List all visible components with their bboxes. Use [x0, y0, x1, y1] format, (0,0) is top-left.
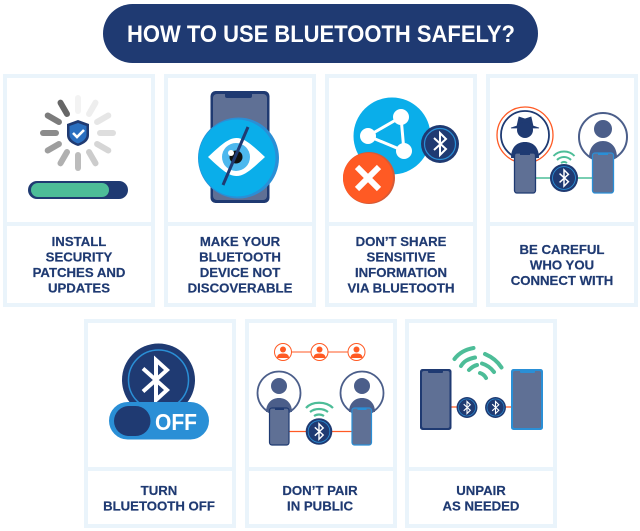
- label: make device not discoverable: MAKE YOUR: [200, 234, 281, 249]
- panel: turn bluetooth off: [84, 319, 236, 528]
- progress bar: [28, 181, 128, 199]
- icon: network of strangers: [274, 344, 365, 360]
- icon: bluetooth badge: [421, 125, 459, 163]
- label: install security patches: PATCHES AND: [33, 265, 125, 280]
- connection lines: [535, 177, 592, 179]
- label: install security patches: UPDATES: [48, 280, 110, 296]
- label: don't pair in public: DON’T PAIR: [282, 483, 358, 498]
- panel: install security patches: [3, 74, 155, 307]
- title banner: HOW TO USE BLUETOOTH SAFELY?: [127, 21, 515, 48]
- label: install security patches: INSTALL: [52, 234, 106, 249]
- panel: unpair as needed: [405, 319, 557, 528]
- panel: be careful who you connect with: [486, 74, 638, 307]
- icon: wifi arcs: [454, 348, 502, 378]
- icon: off toggle: [109, 402, 209, 440]
- label: turn bluetooth off: TURN: [141, 483, 177, 498]
- label: don't share sensitive information: INFORMATION: [355, 265, 447, 280]
- icon: left person with phone: [258, 372, 300, 445]
- label: make device not discoverable: BLUETOOTH: [199, 250, 281, 264]
- icon: left bluetooth badge: [457, 397, 477, 418]
- icon: phone: [210, 91, 270, 203]
- label: don't share sensitive information: DON’T SHARE: [356, 234, 447, 249]
- panel: don't pair in public: [245, 319, 397, 528]
- icon: crossed-out eye: [198, 118, 279, 198]
- label: be careful who you connect with: WHO YOU: [530, 258, 594, 272]
- icon: right phone: [511, 369, 543, 430]
- icon: bluetooth badge with wifi: [550, 152, 578, 192]
- panel: don't share sensitive information: [325, 74, 477, 307]
- label: unpair as needed: UNPAIR: [456, 483, 506, 498]
- icon: person with phone: [579, 113, 627, 193]
- panel: make device not discoverable: [164, 74, 316, 307]
- icon: loading spinner with shield: [43, 98, 113, 168]
- label: be careful who you connect with: CONNECT WITH: [511, 273, 613, 288]
- icon: left phone: [420, 369, 452, 430]
- label: don't share sensitive information: SENSITIVE: [367, 250, 436, 264]
- icon: hooded stranger with phone: [497, 107, 553, 193]
- label: unpair as needed: AS NEEDED: [443, 498, 519, 514]
- label: install security patches: SECURITY: [46, 250, 113, 264]
- icon: right bluetooth badge: [485, 397, 506, 418]
- label: don't share sensitive information: VIA BLUETOOTH: [348, 280, 454, 296]
- connection lines: [289, 430, 352, 432]
- icon: right person with phone: [340, 372, 384, 445]
- label: be careful who you connect with: BE CAREFUL: [520, 242, 604, 257]
- label: make device not discoverable: DISCOVERABLE: [188, 280, 293, 296]
- label: don't pair in public: IN PUBLIC: [287, 498, 353, 514]
- label: make device not discoverable: DEVICE NOT: [200, 265, 280, 280]
- label: turn bluetooth off: BLUETOOTH OFF: [103, 498, 215, 514]
- title banner: [103, 4, 538, 63]
- icon: bluetooth circle: [122, 344, 195, 416]
- connection lines: [451, 406, 511, 408]
- icon: off toggle: OFF: [155, 409, 197, 435]
- icon: bluetooth badge with wifi: [306, 403, 333, 445]
- icon: red cross: [343, 152, 395, 204]
- icon: share symbol: [354, 98, 430, 174]
